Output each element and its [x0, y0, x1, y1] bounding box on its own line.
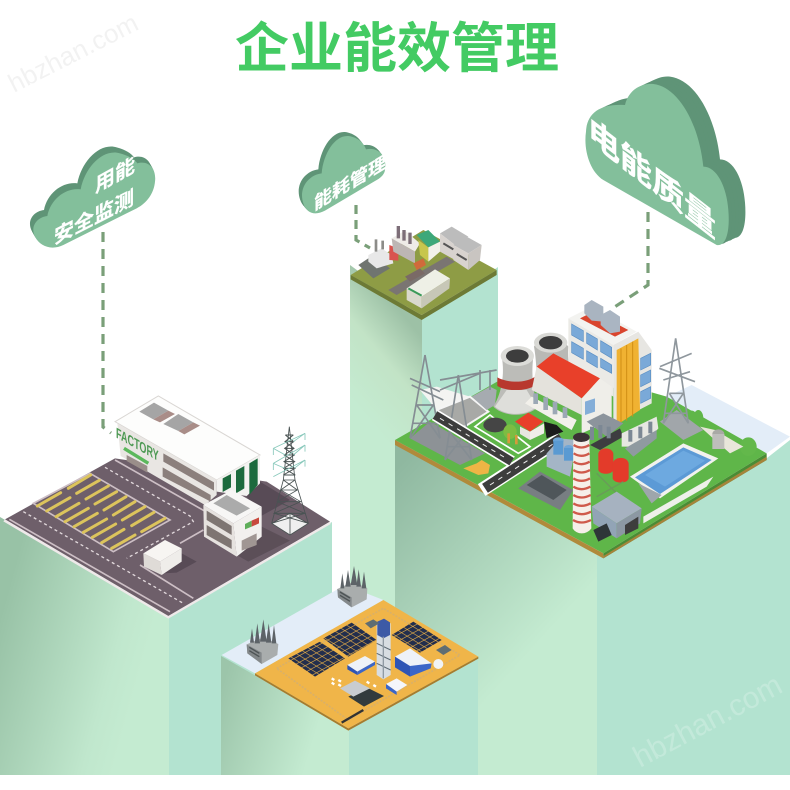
tall central pillar	[350, 265, 498, 700]
pale platform	[222, 585, 383, 673]
cloud: power quality	[585, 77, 745, 246]
substation right	[337, 566, 367, 607]
pale back platform	[667, 385, 790, 453]
dashed connector: left cloud to factory	[103, 232, 111, 433]
title: 企业能效管理	[235, 19, 559, 79]
control tower	[377, 619, 391, 679]
road network	[435, 415, 562, 490]
swimming pool reservoir	[630, 427, 743, 498]
asphalt ground	[5, 458, 330, 616]
factory island	[3, 396, 331, 619]
left pillar	[0, 517, 332, 775]
high-rise office	[568, 300, 652, 425]
cloud label: 用能: 用能	[95, 153, 135, 198]
watermark: top left: hbzhan.com	[3, 7, 143, 98]
dashed connector: right cloud to power station	[610, 212, 648, 310]
right pillar	[395, 440, 790, 775]
red tanks	[597, 448, 629, 497]
olive ground	[351, 230, 497, 315]
small office building	[203, 490, 262, 557]
gold piles	[463, 460, 490, 475]
green roof hall	[417, 230, 440, 262]
cloud: safety monitoring	[30, 147, 155, 249]
warehouses	[440, 227, 482, 270]
solar farm island	[222, 566, 478, 731]
transmission tower	[272, 427, 308, 535]
truck	[413, 258, 426, 270]
main factory building	[115, 396, 260, 505]
mini plant island	[351, 226, 497, 320]
left substation pad	[410, 355, 497, 465]
parking lot	[33, 473, 170, 552]
cloud: energy consumption management	[299, 132, 386, 215]
solar panel arrays	[288, 622, 442, 677]
cloud label: 电能质量: 电能质量	[588, 110, 716, 246]
white utility box	[143, 540, 182, 575]
green ground	[395, 380, 767, 553]
dark machinery pad	[518, 472, 573, 510]
grey generator hall	[592, 477, 713, 542]
power station island	[395, 300, 790, 558]
shrubs and coal piles	[483, 410, 757, 456]
substation left	[247, 619, 278, 664]
striped chimney	[573, 433, 591, 533]
red roof main hall	[525, 353, 612, 433]
small red hut	[515, 413, 563, 440]
orange ground	[255, 600, 478, 728]
generator	[368, 239, 398, 268]
smokestack hall	[392, 226, 420, 263]
shadows	[247, 482, 290, 517]
cloud label: 安全监测: 安全监测	[54, 186, 134, 249]
blue buildings	[347, 648, 443, 695]
transformer yard	[587, 410, 703, 457]
watermark: bottom right: hbzhan.com	[628, 668, 788, 774]
greenhouse	[407, 269, 450, 308]
dashed connector: middle cloud to plant	[356, 205, 370, 248]
cloud label: 能耗管理: 能耗管理	[314, 151, 386, 215]
cooling towers	[493, 333, 577, 415]
main factory building: FACTORY	[116, 425, 159, 465]
dark utility pad	[332, 619, 452, 723]
right pylon	[659, 338, 695, 423]
blue tank building	[547, 437, 577, 477]
lower central pillar	[221, 656, 478, 775]
